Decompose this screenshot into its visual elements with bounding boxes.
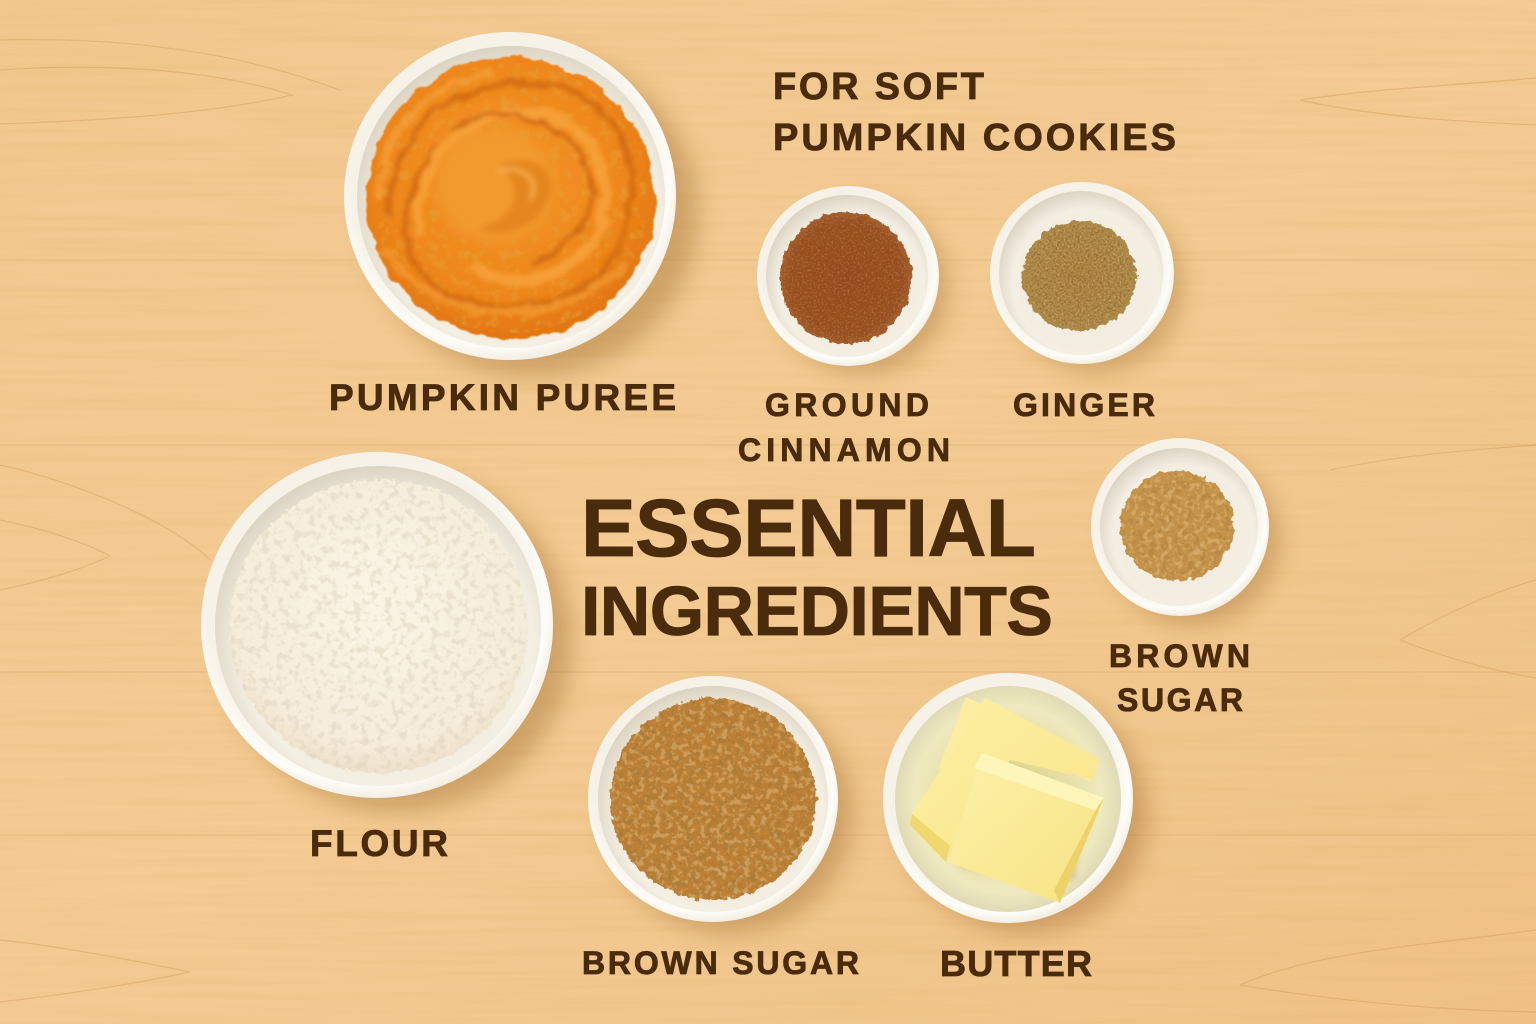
label: ground cinnamon: CINNAMON	[738, 432, 950, 468]
subtitle heading: PUMPKIN COOKIES	[773, 117, 1176, 159]
main title	[581, 483, 1053, 650]
label: butter: BUTTER	[940, 943, 1092, 984]
label: small brown sugar: SUGAR	[1117, 682, 1243, 718]
label: brown sugar: BROWN SUGAR	[582, 945, 859, 981]
label: small brown sugar	[1109, 638, 1250, 718]
label: ginger: GINGER	[1013, 387, 1155, 423]
small brown sugar food	[1120, 471, 1234, 581]
label: flour: FLOUR	[310, 823, 448, 864]
flour food	[229, 478, 529, 774]
pumpkin puree bowl	[344, 32, 698, 376]
main title: ESSENTIAL	[581, 483, 1036, 574]
subtitle heading: FOR SOFT	[773, 66, 984, 108]
cinnamon bowl	[757, 186, 948, 374]
ginger powder	[1022, 221, 1136, 331]
pumpkin puree food	[367, 57, 655, 339]
butter bowl	[883, 673, 1148, 933]
subtitle heading	[773, 66, 1176, 159]
small brown sugar bowl	[1091, 438, 1279, 625]
flour bowl	[201, 452, 572, 812]
main title: INGREDIENTS	[581, 572, 1053, 650]
large brown sugar food	[610, 698, 816, 900]
label: ground cinnamon: GROUND	[765, 387, 929, 423]
label: pumpkin puree: PUMPKIN PUREE	[329, 377, 676, 418]
label: small brown sugar: BROWN	[1109, 638, 1250, 674]
butter pats	[910, 697, 1104, 903]
ginger bowl	[990, 182, 1182, 372]
large brown sugar bowl	[588, 676, 853, 933]
label: ground cinnamon	[738, 387, 950, 468]
cinnamon powder	[780, 212, 912, 344]
